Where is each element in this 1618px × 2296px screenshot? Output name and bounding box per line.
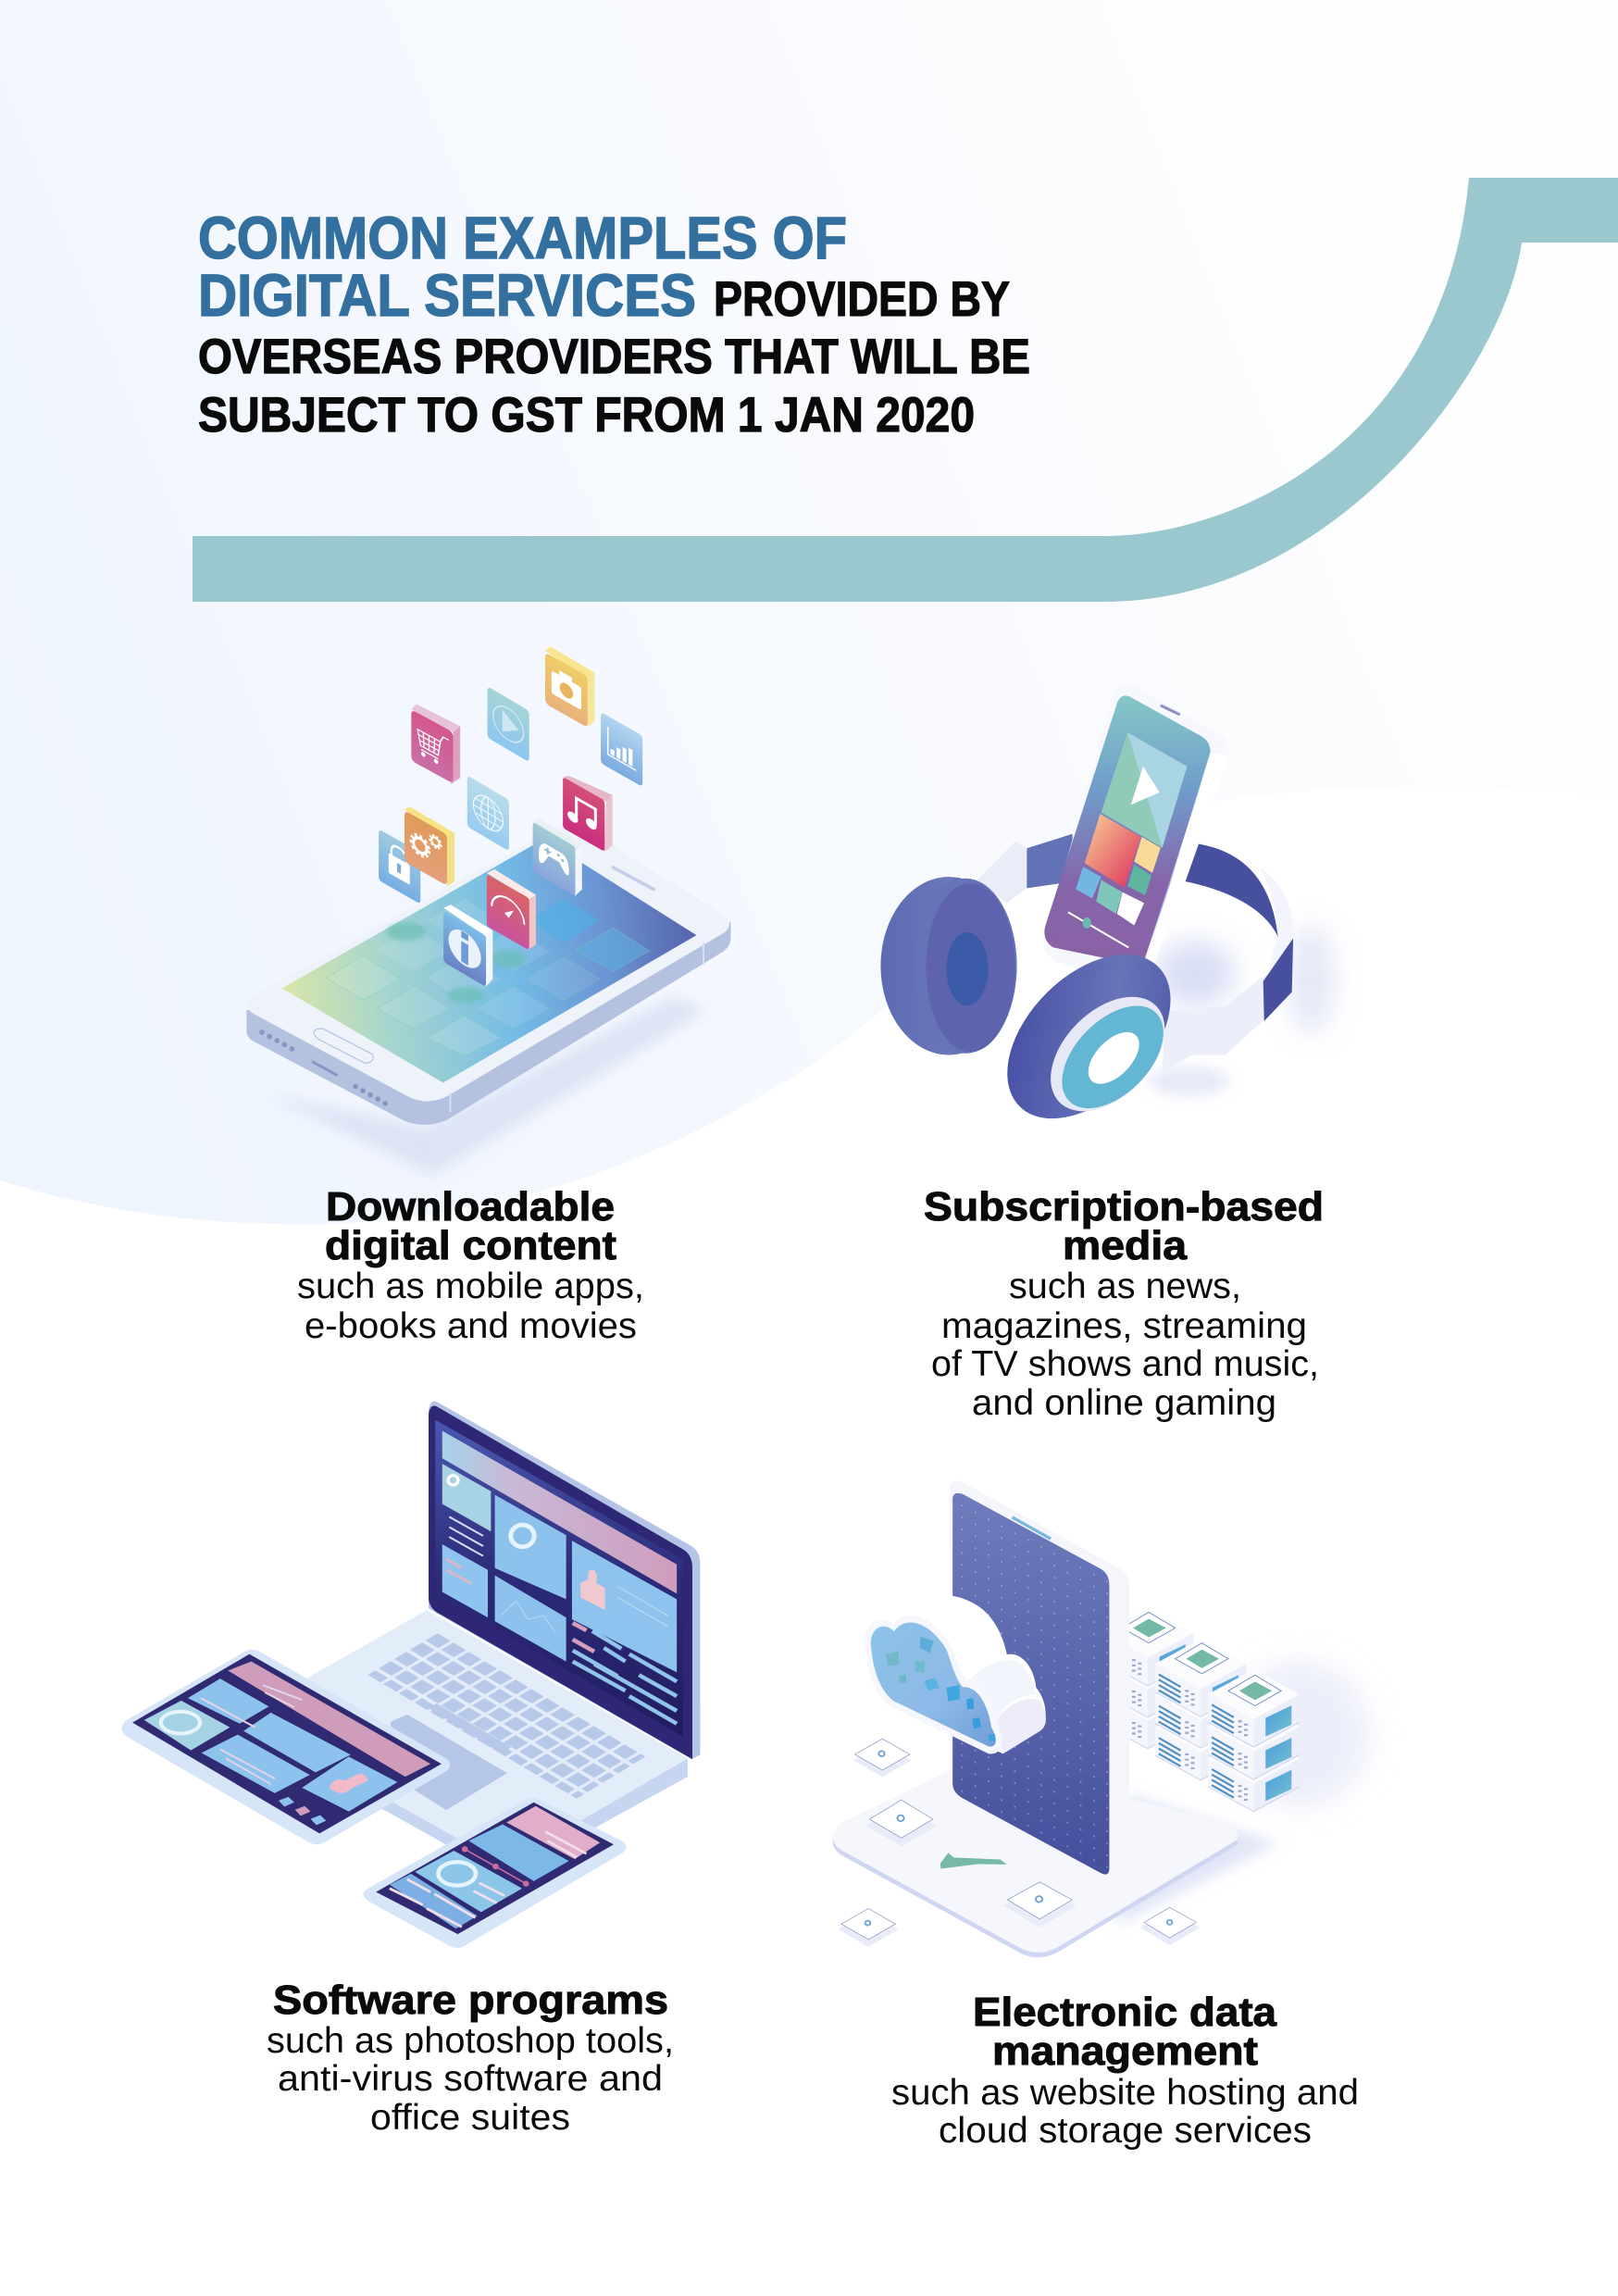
icon: chart <box>601 712 642 787</box>
text: downloadable digital content: e-books and movies <box>305 1306 637 1346</box>
text: subscription-based media: media <box>1063 1223 1188 1268</box>
right ear cup <box>975 926 1203 1147</box>
text: electronic data management: management <box>992 2028 1258 2074</box>
icon: play <box>488 686 529 762</box>
cloud <box>865 1595 1046 1753</box>
text: subscription-based media: and online gaming <box>972 1383 1276 1423</box>
smartphone <box>364 1798 627 1948</box>
text: downloadable digital content: digital content <box>325 1223 616 1268</box>
text: electronic data management: cloud storage services <box>939 2111 1312 2151</box>
text: downloadable digital content <box>297 1184 644 1346</box>
icon: gears <box>404 806 454 887</box>
teal swoosh banner <box>193 178 1618 602</box>
title: PROVIDED BY <box>714 272 1010 327</box>
text: software programs: office suites <box>370 2098 570 2138</box>
title: SUBJECT TO GST FROM 1 JAN 2020 <box>198 388 975 443</box>
text: software programs <box>267 1978 674 2138</box>
text: software programs: such as photoshop tools, <box>267 2021 674 2061</box>
text: electronic data management <box>891 1990 1359 2151</box>
text: software programs: Software programs <box>273 1978 668 2023</box>
illustration: smartphone with floating app icons <box>246 646 731 1175</box>
text: downloadable digital content: such as mobile apps, <box>297 1267 644 1306</box>
icon: music note <box>563 776 613 852</box>
icon: speed gauge <box>487 869 536 950</box>
headband front arm <box>1163 977 1264 1072</box>
phone shadow <box>266 995 709 1175</box>
text: subscription-based media: of TV shows and music, <box>931 1344 1319 1384</box>
text: subscription-based media: magazines, streaming <box>941 1306 1307 1346</box>
text: subscription-based media: Subscription-based <box>924 1184 1324 1229</box>
title: DIGITAL SERVICES <box>198 262 696 329</box>
tablet device <box>950 1480 1129 1884</box>
icon: globe <box>467 775 509 851</box>
text: software programs: anti-virus software and <box>278 2059 663 2099</box>
illustration: laptop, tablet and phone <box>122 1402 700 1948</box>
phone screen <box>282 839 696 1083</box>
icon: camera <box>545 646 595 728</box>
icon: information <box>443 905 492 987</box>
title <box>198 205 1030 443</box>
check mark <box>940 1853 1007 1869</box>
music player <box>1044 683 1228 974</box>
title: OVERSEAS PROVIDERS THAT WILL BE <box>198 330 1030 384</box>
server racks <box>1102 1608 1300 1812</box>
text: downloadable digital content: Downloadable <box>326 1184 615 1229</box>
icon: shopping cart <box>411 705 460 784</box>
illustration: headphones and music player <box>880 683 1334 1147</box>
small chip tiles <box>838 1739 1200 1947</box>
text: subscription-based media: such as news, <box>1009 1267 1241 1306</box>
phone hardware details <box>262 867 653 1105</box>
laptop screen <box>429 1402 700 1759</box>
laptop base <box>240 1610 688 1878</box>
phone body <box>246 825 731 1125</box>
text: electronic data management: Electronic data <box>973 1990 1277 2035</box>
tablet <box>122 1650 450 1844</box>
headphone shadow <box>1149 925 1334 1096</box>
icon: padlock <box>379 829 420 905</box>
background soft blue wave <box>0 0 1618 1224</box>
text: subscription-based media <box>924 1184 1324 1423</box>
illustration: cloud storage with servers <box>833 1480 1369 1957</box>
platform and shadows <box>833 1661 1369 1957</box>
icon: game controller <box>533 818 582 896</box>
text: electronic data management: such as website hosting and <box>891 2073 1359 2113</box>
left ear cup <box>880 877 1017 1054</box>
headband back <box>977 834 1293 1021</box>
title: COMMON EXAMPLES OF <box>198 205 847 271</box>
